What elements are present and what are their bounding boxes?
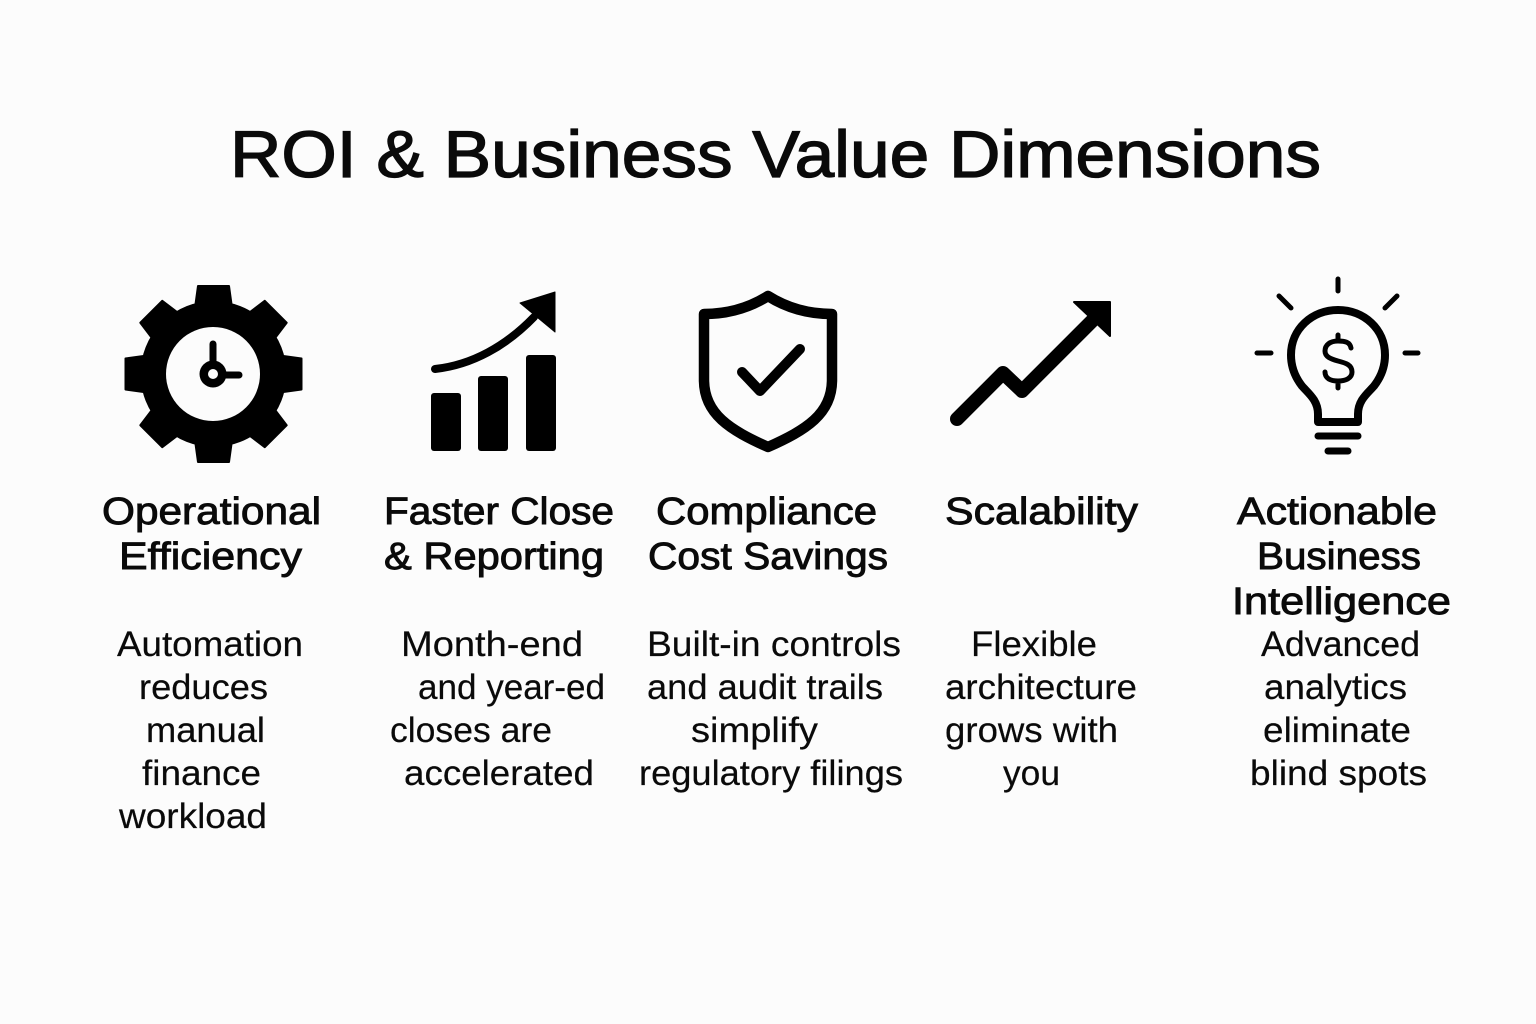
panel: faster close and reporting bbox=[384, 292, 614, 793]
icon: shield with check mark bbox=[704, 296, 832, 447]
text: faster close description: closes are bbox=[390, 711, 552, 750]
text: compliance description bbox=[639, 625, 903, 793]
heading: actionable business intelligence: Business bbox=[1257, 536, 1421, 578]
text: business intelligence description: blind spots bbox=[1250, 754, 1427, 793]
panel: scalability bbox=[945, 302, 1138, 793]
text: faster close description: Month-end bbox=[401, 625, 583, 664]
heading: operational efficiency: Efficiency bbox=[119, 536, 302, 578]
text: business intelligence description: analytics bbox=[1264, 668, 1407, 707]
text: scalability description: architecture bbox=[945, 668, 1137, 707]
title: ROI & Business Value Dimensions bbox=[230, 117, 1321, 191]
icon: zigzag growth arrow bbox=[957, 302, 1110, 419]
heading: compliance cost savings bbox=[648, 491, 888, 578]
icon: light bulb with dollar sign bbox=[1257, 279, 1418, 451]
icon: bar chart with rising arrow bbox=[431, 292, 556, 451]
heading: faster close and reporting bbox=[384, 491, 614, 578]
text: scalability description: grows with bbox=[945, 711, 1118, 750]
panel: actionable business intelligence bbox=[1232, 279, 1451, 793]
heading: actionable business intelligence bbox=[1232, 491, 1451, 623]
text: faster close description: accelerated bbox=[404, 754, 594, 793]
text: business intelligence description bbox=[1250, 625, 1427, 793]
text: business intelligence description: Advanced bbox=[1261, 625, 1420, 664]
text: operational efficiency description: manual bbox=[146, 711, 265, 750]
text: operational efficiency description: finance bbox=[142, 754, 261, 793]
heading: scalability: Scalability bbox=[945, 491, 1138, 533]
text: business intelligence description: eliminate bbox=[1263, 711, 1411, 750]
text: operational efficiency description: workload bbox=[118, 797, 267, 836]
heading: actionable business intelligence: Intelligence bbox=[1232, 581, 1451, 623]
panel: operational efficiency bbox=[102, 286, 321, 836]
text: compliance description: regulatory filings bbox=[639, 754, 903, 793]
text: operational efficiency description: Automation bbox=[117, 625, 303, 664]
text: operational efficiency description bbox=[117, 625, 303, 836]
panel: compliance cost savings bbox=[639, 296, 903, 793]
heading: faster close and reporting: & Reporting bbox=[384, 536, 604, 578]
heading: actionable business intelligence: Actionable bbox=[1237, 491, 1437, 533]
text: scalability description: Flexible bbox=[971, 625, 1097, 664]
text: operational efficiency description: reduces bbox=[139, 668, 268, 707]
heading: faster close and reporting: Faster Close bbox=[384, 491, 614, 533]
text: faster close description bbox=[390, 625, 605, 793]
text: scalability description bbox=[945, 625, 1137, 793]
text: compliance description: Built-in controls bbox=[647, 625, 901, 664]
heading: compliance cost savings: Compliance bbox=[656, 491, 877, 533]
heading: compliance cost savings: Cost Savings bbox=[648, 536, 888, 578]
text: compliance description: and audit trails bbox=[647, 668, 883, 707]
text: scalability description: you bbox=[1003, 754, 1060, 793]
heading: operational efficiency: Operational bbox=[102, 491, 321, 533]
text: compliance description: simplify bbox=[691, 711, 819, 750]
icon: gear with clock bbox=[126, 286, 302, 462]
text: faster close description: and year-ed bbox=[418, 668, 605, 707]
heading: operational efficiency bbox=[102, 491, 321, 578]
